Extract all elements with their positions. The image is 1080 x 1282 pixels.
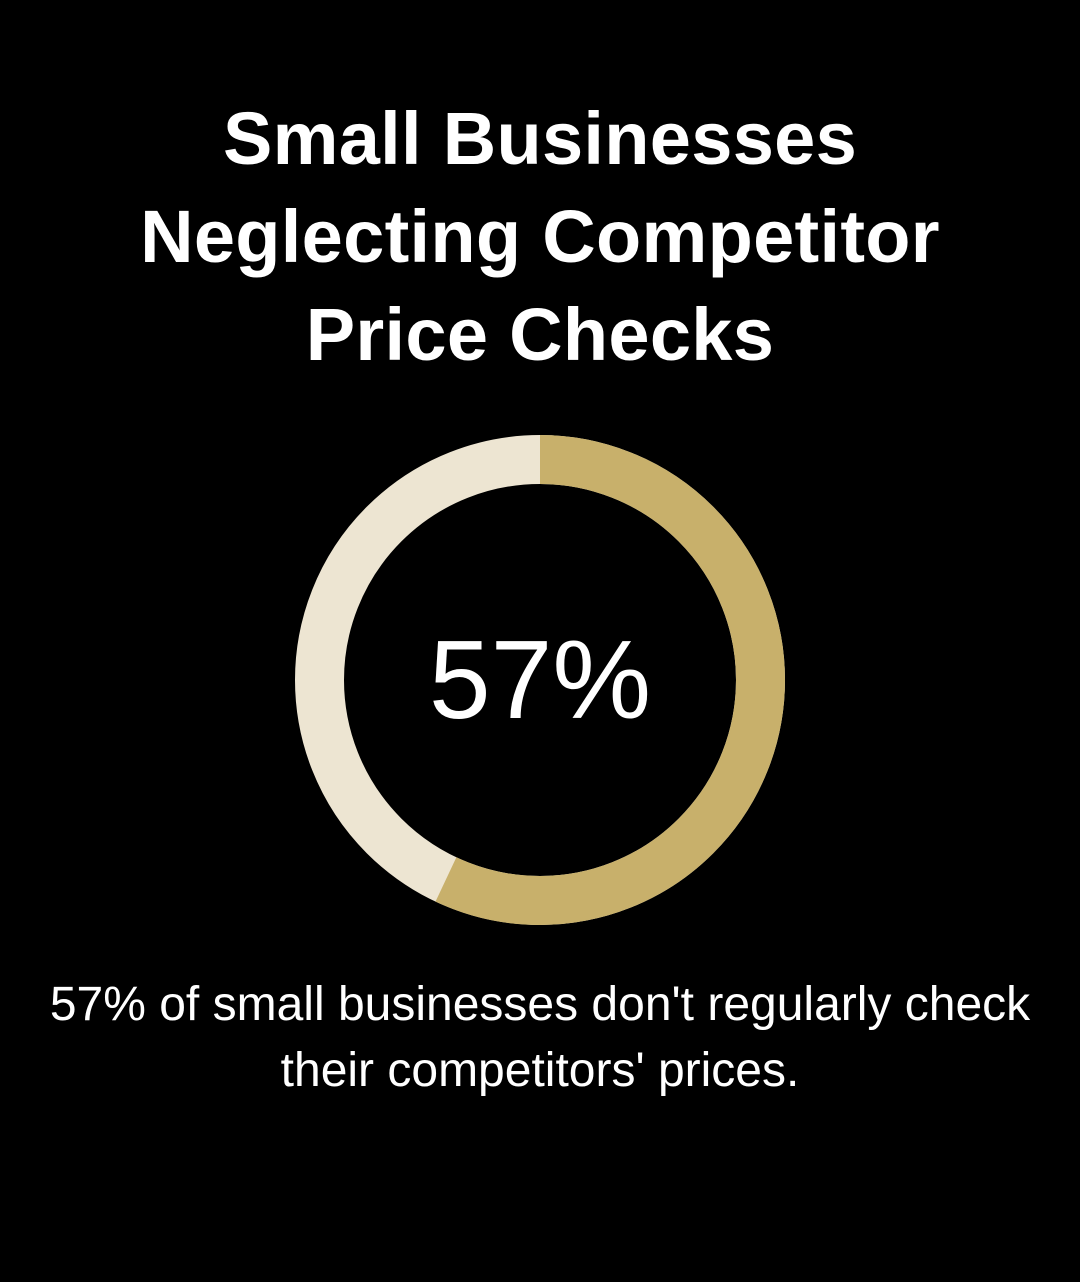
center value: 57% (429, 618, 651, 742)
donut chart (295, 435, 785, 925)
title: Neglecting Competitor (140, 195, 940, 278)
title: Price Checks (306, 293, 774, 376)
57% segment (320, 460, 760, 900)
title (140, 97, 940, 376)
title: Small Businesses (223, 97, 857, 180)
caption: their competitors' prices. (281, 1044, 799, 1097)
caption: 57% of small businesses don't regularly check (50, 978, 1030, 1031)
caption (50, 978, 1030, 1097)
remaining segment (320, 460, 760, 900)
